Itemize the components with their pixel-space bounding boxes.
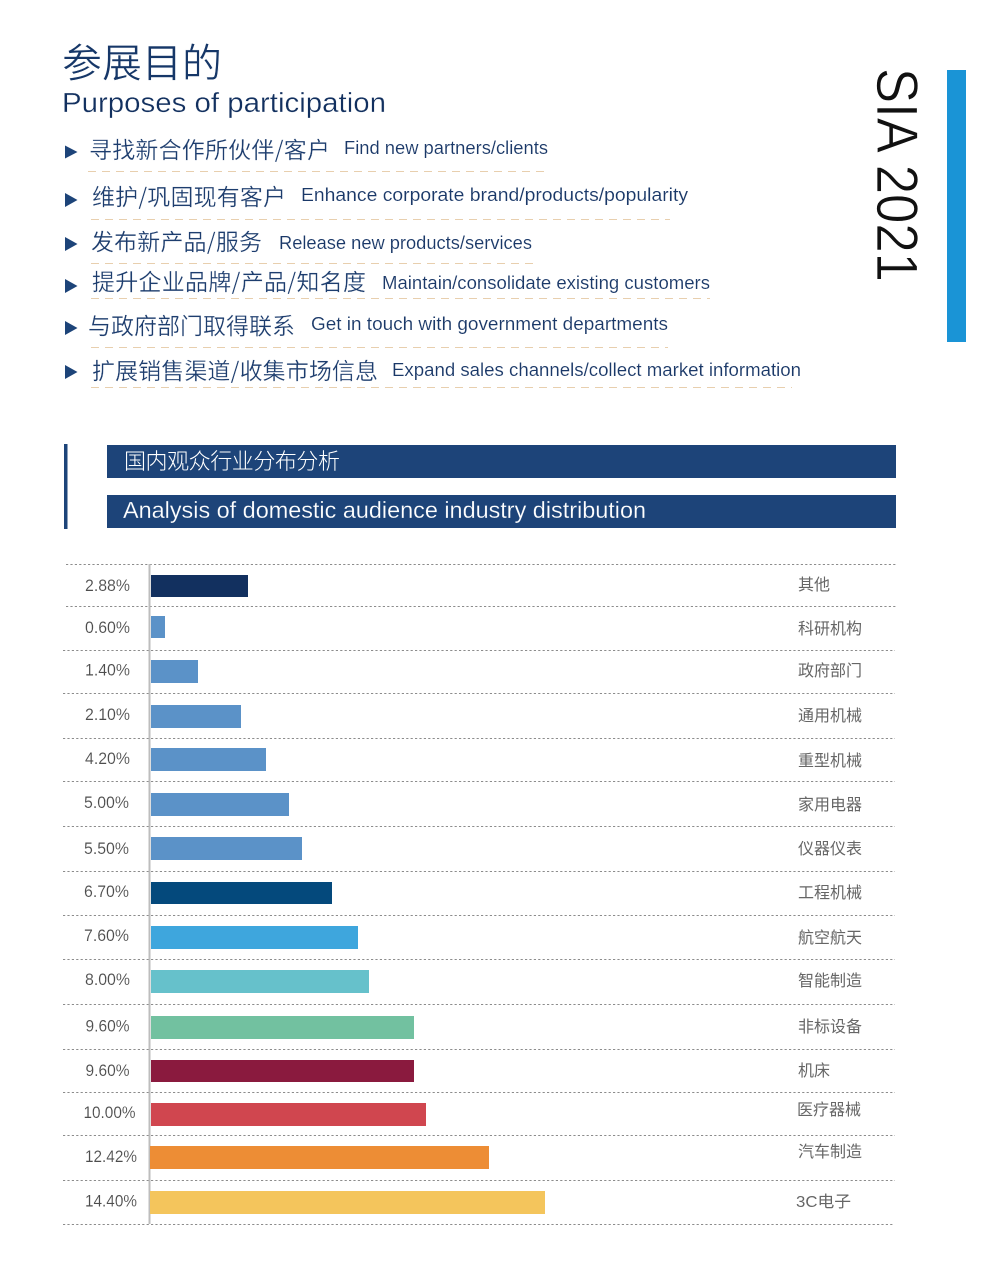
row: 非标设备: 9.60% [86,1016,130,1036]
side label: SIA 2021: SIA 2021 [864,68,929,282]
purpose item 2: Enhance corporate brand/products/popularity [301,185,688,205]
heading side rule [64,444,68,529]
row: 医疗器械: 10.00% [84,1103,136,1122]
row: 通用机械 [85,702,862,728]
bar chart [63,564,896,1224]
row: 仪器仪表: 5.50% [84,839,129,858]
purpose item 3 [65,223,533,264]
axis [148,564,150,1224]
row: 仪器仪表: 仪器仪表 [798,835,862,859]
row: 机床: 9.60% [86,1061,130,1080]
row: 智能制造 [85,967,862,993]
purpose item 1 [65,131,550,172]
title: chinese: 参展目的 [62,31,222,89]
row: 汽车制造: 汽车制造 [798,1138,862,1162]
row: 工程机械: 工程机械 [798,879,862,903]
purpose item 1: Find new partners/clients [344,138,548,158]
row: 其他: 2.88% [85,576,130,595]
row: 家用电器: 5.00% [84,793,129,812]
row: 通用机械: 通用机械 [798,702,862,726]
purpose item 2: 维护/巩固现有客户 [92,178,286,212]
accent bar [947,70,966,342]
purpose item 4: Maintain/consolidate existing customers [382,273,710,293]
row: 工程机械: 6.70% [84,882,129,901]
section heading [64,444,896,529]
row: 机床 [86,1057,830,1082]
title: english: Purposes of participation [62,87,386,118]
purposes list [65,131,801,388]
row: 非标设备 [86,1013,862,1039]
row: 航空航天: 航空航天 [798,924,862,948]
purpose item 3: 发布新产品/服务 [91,223,262,257]
row: 医疗器械 [84,1096,861,1126]
row: 政府部门 [85,657,862,683]
row: 机床: 机床 [798,1057,830,1081]
purpose item 4: 提升企业品牌/产品/知名度 [92,263,366,297]
row: 政府部门: 1.40% [85,660,130,680]
row: 科研机构 [85,615,862,639]
purpose item 2 [65,178,688,220]
purpose item 6: 扩展销售渠道/收集市场信息 [92,352,378,386]
heading bar: english: Analysis of domestic audience industry distribution [123,497,646,523]
row: 3C电子 [85,1191,851,1214]
purpose item 1: 寻找新合作所伙伴/客户 [89,131,330,165]
row: 智能制造: 8.00% [85,970,130,989]
row: 3C电子: 3C电子 [796,1193,851,1211]
purpose item 5: 与政府部门取得联系 [88,307,295,341]
row: 3C电子: 14.40% [85,1192,137,1210]
row: 科研机构: 科研机构 [798,615,862,639]
row: 其他 [85,571,830,597]
row: 航空航天 [84,924,862,949]
row: 医疗器械: 医疗器械 [797,1096,861,1120]
purpose item 5 [65,307,668,348]
row: 汽车制造 [85,1138,862,1169]
row: 政府部门: 政府部门 [798,657,862,681]
row: 智能制造: 智能制造 [798,967,862,991]
row: 仪器仪表 [84,835,862,860]
row: 家用电器: 家用电器 [798,791,862,815]
row: 家用电器 [84,791,862,816]
row: 工程机械 [84,879,862,904]
purpose item 3: Release new products/services [279,233,532,253]
row: 科研机构: 0.60% [85,618,130,637]
row: 重型机械 [85,747,862,771]
heading bar: chinese [107,444,896,478]
purpose item 4 [65,263,710,298]
purpose item 6: Expand sales channels/collect market information [392,360,801,380]
row: 重型机械: 重型机械 [798,747,862,771]
row: 汽车制造: 12.42% [85,1147,137,1166]
row: 航空航天: 7.60% [84,926,129,945]
row: 重型机械: 4.20% [85,749,130,768]
heading bar: english [107,495,896,528]
row: 通用机械: 2.10% [85,705,130,724]
purpose item 6 [65,352,801,388]
row: 非标设备: 非标设备 [798,1013,862,1037]
row: 其他: 其他 [798,571,830,595]
purpose item 5: Get in touch with government departments [311,314,668,334]
heading bar: chinese: 国内观众行业分布分析 [124,444,340,476]
